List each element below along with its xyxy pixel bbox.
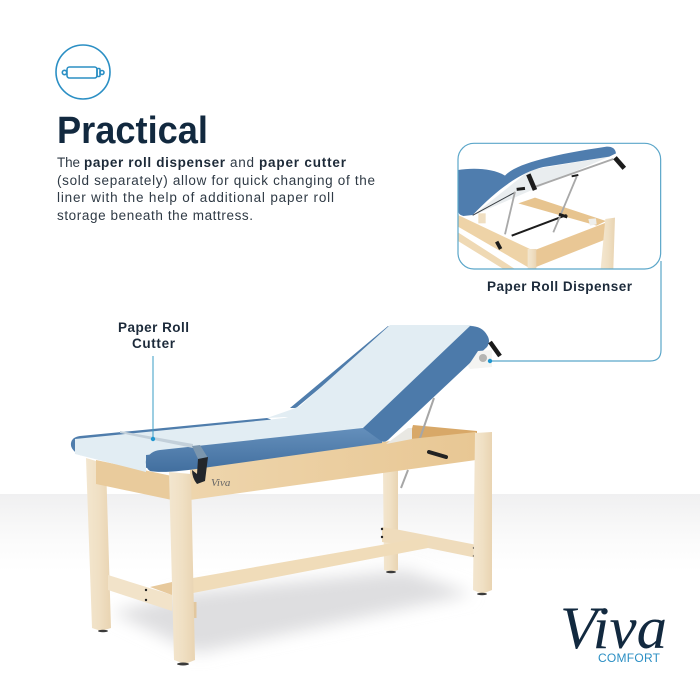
- stretcher top: [150, 582, 172, 595]
- label: paper roll cutter: Paper Roll: [118, 320, 189, 335]
- body text: [57, 155, 375, 223]
- body text: paper roll dispenser: [84, 155, 226, 170]
- roll hub: [479, 354, 487, 362]
- cutter strap: [192, 445, 208, 459]
- front right leg: [473, 432, 492, 594]
- body text: and: [230, 155, 254, 170]
- seat paper liner: [75, 417, 380, 472]
- inset struts: [505, 159, 613, 234]
- heading: Practical: [57, 110, 208, 152]
- inset right rail: [535, 222, 607, 267]
- massage table: [71, 325, 500, 666]
- left end stretcher: [108, 575, 172, 611]
- strut upper: [419, 398, 434, 441]
- backrest paper liner: [267, 325, 472, 428]
- inset cushion: [458, 147, 616, 216]
- body text: storage beneath the mattress.: [57, 208, 253, 223]
- front left leg: [169, 472, 195, 664]
- feet: [98, 571, 487, 666]
- label: paper roll cutter: Cutter: [132, 336, 176, 351]
- connector: cutter: [151, 356, 155, 441]
- connector: dispenser: [488, 261, 661, 363]
- right end stretcher: [382, 527, 477, 558]
- logo: Viva Comfort: Viva: [560, 595, 667, 661]
- body text: (sold separately) allow for quick changing of the: [57, 173, 375, 188]
- inset frame: [458, 143, 661, 269]
- inset left rail: [458, 215, 530, 268]
- label: paper roll cutter: [118, 320, 189, 351]
- inset panel: paper roll dispenser: [458, 143, 661, 269]
- inset front leg: [528, 249, 536, 269]
- floor background: [0, 494, 700, 572]
- frame interior: [408, 425, 477, 443]
- back left leg: [86, 458, 111, 631]
- inset brackets: [497, 158, 624, 249]
- central stretcher: [193, 537, 428, 593]
- rail logo: Viva: [211, 477, 231, 489]
- inset right leg: [601, 218, 615, 269]
- inset back rail: [518, 198, 606, 226]
- mechanism plate: [386, 428, 412, 444]
- backrest left edge: [290, 326, 392, 408]
- body text: paper cutter: [259, 155, 347, 170]
- paper roll: [468, 350, 492, 369]
- strut lower: [401, 470, 408, 488]
- dispenser bracket: [490, 342, 500, 356]
- icon: paper roll: [56, 45, 110, 99]
- body text: The: [57, 155, 80, 170]
- seat left blue edge: [71, 418, 300, 468]
- seat front bolster: [146, 427, 382, 472]
- logo: Viva Comfort: COMFORT: [598, 651, 661, 665]
- inset underside edge: [473, 192, 515, 215]
- body text: liner with the help of additional paper roll: [57, 190, 334, 205]
- cutter black loop: [192, 457, 208, 484]
- floor shadow: [112, 570, 472, 653]
- inset back post: [478, 213, 486, 223]
- adjust handle: [429, 452, 446, 457]
- stretcher block: [193, 602, 196, 618]
- label: paper roll dispenser: Paper Roll Dispenser: [487, 279, 633, 294]
- inset strut bar: [512, 215, 567, 236]
- stretcher bolts: [145, 528, 475, 601]
- inset cushion underside: [473, 157, 609, 216]
- front rail: [190, 432, 476, 500]
- inset plate: [588, 218, 597, 226]
- cutter band: [120, 431, 193, 448]
- backrest bolster: [363, 326, 489, 442]
- back right leg: [383, 470, 398, 572]
- end rail: [96, 460, 172, 500]
- inset lower stretcher: [458, 232, 515, 269]
